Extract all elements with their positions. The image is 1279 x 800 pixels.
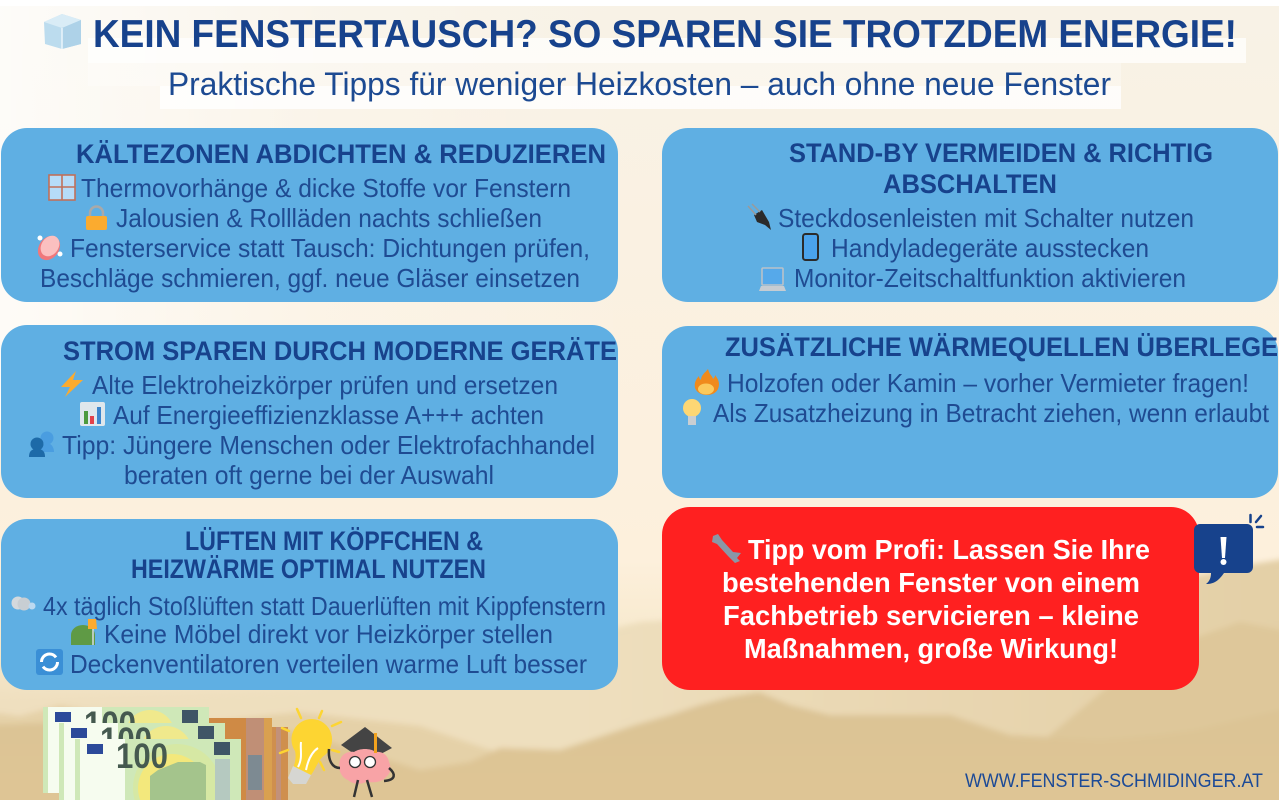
- icon: ice cube: [44, 14, 81, 49]
- icon: wrench: [712, 534, 741, 563]
- icon: laptop: [759, 268, 786, 291]
- text line: Monitor-Zeitschaltfunktion aktivieren: [794, 263, 1186, 293]
- title highlight band: [88, 38, 1246, 63]
- text line: bestehenden Fenster von einem: [722, 567, 1140, 598]
- panel: Stand-by vermeiden: [662, 128, 1278, 302]
- illustration: euro banknotes: 100: [84, 705, 136, 744]
- heading line 1: STAND-BY VERMEIDEN & RICHTIG: [789, 138, 1213, 168]
- text line: Steckdosenleisten mit Schalter nutzen: [778, 203, 1194, 233]
- illustration: brain with graduation cap: [329, 727, 394, 797]
- text line: Jalousien & Rollläden nachts schließen: [116, 203, 542, 233]
- text line: Tipp: Jüngere Menschen oder Elektrofachhandel: [62, 430, 595, 460]
- text line: Auf Energieeffizienzklasse A+++ achten: [113, 400, 544, 430]
- icon: smartphone: [803, 234, 818, 260]
- heading line 2: HEIZWÄRME OPTIMAL NUTZEN: [131, 554, 486, 584]
- text line: Deckenventilatoren verteilen warme Luft besser: [70, 649, 587, 679]
- panel: Kältezonen abdichten: [1, 128, 618, 302]
- icon: people: [29, 432, 54, 457]
- icon: soap: [33, 232, 65, 264]
- subtitle highlight band: [160, 86, 1121, 109]
- text line: 4x täglich Stoßlüften statt Dauerlüften mit Kippfenstern: [43, 591, 606, 621]
- icon: lightning bolt: [61, 371, 83, 397]
- title: KEIN FENSTERTAUSCH? SO SPAREN SIE TROTZDEM ENERGIE!: [93, 13, 1237, 56]
- illustration: euro banknotes: [43, 705, 288, 800]
- heading: KÄLTEZONEN ABDICHTEN & REDUZIEREN: [76, 139, 606, 169]
- text line: Beschläge schmieren, ggf. neue Gläser einsetzen: [40, 263, 580, 293]
- panel: Strom sparen: [1, 325, 618, 498]
- icon: lock: [86, 207, 107, 230]
- text line: beraten oft gerne bei der Auswahl: [124, 460, 494, 490]
- band between title and subtitle: [88, 63, 1121, 86]
- illustration: euro banknotes: 100: [116, 737, 168, 776]
- illustration: euro banknotes: 100: [100, 721, 152, 760]
- icon: sofa and lamp: [71, 619, 97, 645]
- icon: bar chart: [80, 402, 105, 426]
- illustration: light bulb: [280, 709, 341, 784]
- icon: wind cloud: [12, 596, 36, 610]
- panel: Zusätzliche Wärmequellen: [662, 326, 1278, 498]
- text line: Thermovorhänge & dicke Stoffe vor Fenstern: [81, 173, 571, 203]
- text line: Handyladegeräte ausstecken: [831, 233, 1149, 263]
- text line: Alte Elektroheizkörper prüfen und ersetzen: [92, 370, 558, 400]
- text line: Keine Möbel direkt vor Heizkörper stellen: [104, 619, 553, 649]
- icon: speech bubble with exclamation mark: [1194, 515, 1263, 584]
- icon: refresh arrows: [36, 649, 63, 675]
- heading line 2: ABSCHALTEN: [883, 169, 1057, 199]
- icon: fire: [695, 369, 719, 395]
- text line: Fensterservice statt Tausch: Dichtungen prüfen,: [70, 233, 590, 263]
- text line: Holzofen oder Kamin – vorher Vermieter fragen!: [727, 368, 1249, 398]
- callout: Tipp vom Profi: [662, 507, 1199, 690]
- icon: plug: [748, 204, 771, 230]
- panel: Lüften: [1, 519, 618, 690]
- text line: Tipp vom Profi: Lassen Sie Ihre: [748, 534, 1150, 565]
- heading: STROM SPAREN DURCH MODERNE GERÄTE: [63, 336, 617, 366]
- text line: Maßnahmen, große Wirkung!: [744, 633, 1118, 664]
- icon: window: [49, 175, 75, 200]
- icon: light bulb: [683, 399, 701, 425]
- subtitle: Praktische Tipps für weniger Heizkosten – auch ohne neue Fenster: [168, 66, 1111, 102]
- text line: Fachbetrieb servicieren – kleine: [723, 600, 1139, 631]
- heading line 1: LÜFTEN MIT KÖPFCHEN &: [185, 526, 483, 556]
